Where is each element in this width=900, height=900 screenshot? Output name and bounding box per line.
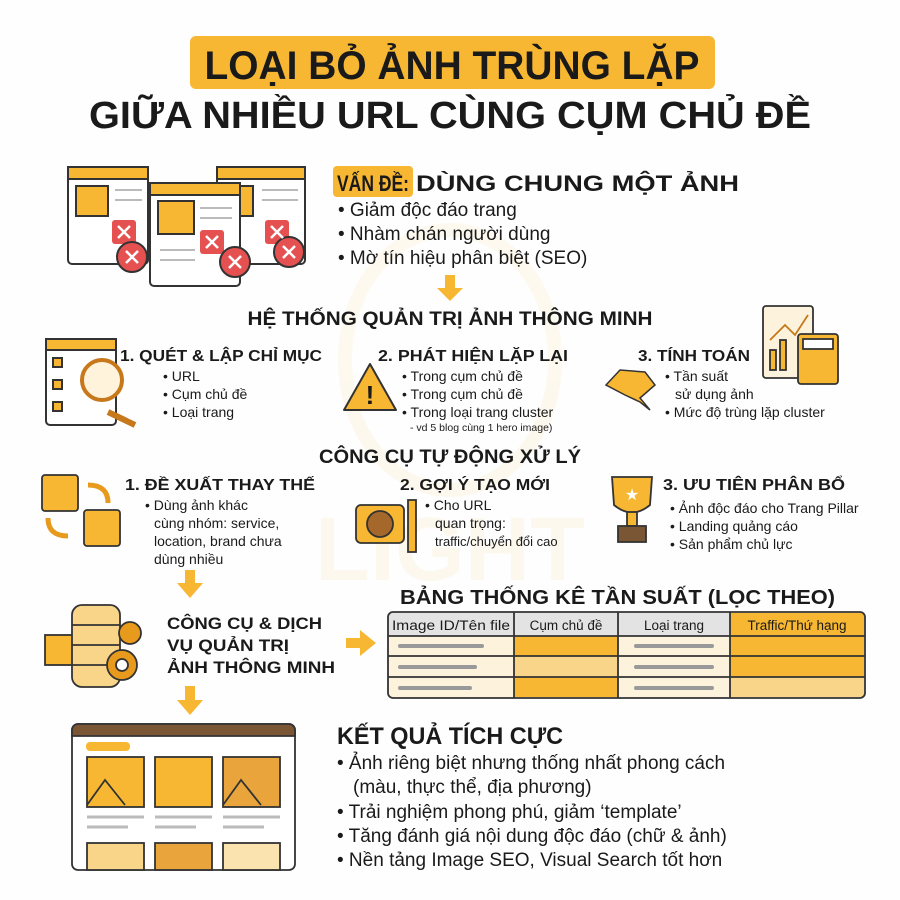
step 2 detect: 2. PHÁT HIỆN LẶP LẠI [378,346,568,365]
results bullets: • Ảnh riêng biệt nhưng thống nhất phong cách [337,752,725,774]
problem bullets [338,200,587,269]
step 1 replace: cùng nhóm: service, [154,515,279,531]
icon: calculator chart [763,306,838,384]
heading: problem: DÙNG CHUNG MỘT ẢNH [416,171,739,196]
step 3 calculate: 3. TÍNH TOÁN [638,346,750,365]
results bullets: • Nền tảng Image SEO, Visual Search tốt hơn [337,850,722,871]
step 1 replace: location, brand chưa [154,533,282,549]
step 2 create: traffic/chuyển đổi cao [435,534,558,549]
problem bullets: • Mờ tín hiệu phân biệt (SEO) [338,248,587,269]
heading: problem: VẤN ĐỀ: [337,171,409,196]
heading: problem [333,166,739,197]
step 2 detect: • Trong cụm chủ đề [402,386,523,402]
step 2 create [400,475,558,549]
results bullets: (màu, thực thể, địa phương) [353,777,592,798]
icon: warning [344,364,396,410]
arrow down [177,686,203,715]
heading: results: KẾT QUẢ TÍCH CỰC [337,721,563,750]
step 2 create: quan trọng: [435,515,506,531]
heading: table: BẢNG THỐNG KÊ TẦN SUẤT (LỌC THEO) [400,585,835,609]
step 1 scan: • Loại trang [163,404,234,420]
watermark [315,230,585,600]
step 2 create: 2. GỢI Ý TẠO MỚI [400,475,550,494]
step 2 detect: • Trong loại trang cluster [402,404,554,420]
icon: duplicate pages [68,167,305,286]
table: Cụm chủ đề [530,618,602,633]
step 1 replace: • Dùng ảnh khác [145,497,248,513]
problem bullets: • Nhàm chán người dùng [338,224,550,245]
step 2 detect: • Trong cụm chủ đề [402,368,523,384]
arrow down [437,275,463,301]
step 3 priority: • Landing quảng cáo [670,518,798,534]
results bullets: • Trải nghiệm phong phú, giảm ‘template’ [337,802,682,823]
step 2 detect [378,346,568,434]
icon: browser results [72,724,295,870]
icon: trophy [612,477,652,542]
results bullets [337,752,727,871]
heading: auto tools: CÔNG CỤ TỰ ĐỘNG XỬ LÝ [319,446,581,468]
step 3 calculate [638,346,825,420]
step 3 priority: 3. ƯU TIÊN PHÂN BỔ [663,475,845,494]
text: tools service: VỤ QUẢN TRỊ [167,636,289,655]
text: tools service [167,614,335,677]
table [388,612,865,698]
step 1 scan: • Cụm chủ đề [163,386,247,402]
text: tools service: CÔNG CỤ & DỊCH [167,614,322,633]
icon: warning: ! [366,380,374,410]
step 1 replace: 1. ĐỀ XUẤT THAY THẾ [125,475,315,494]
title: GIỮA NHIỀU URL CÙNG CỤM CHỦ ĐỀ [89,93,811,137]
table: Traffic/Thứ hạng [747,618,847,633]
step 3 priority: • Ảnh độc đáo cho Trang Pillar [670,500,859,516]
step 1 replace [125,475,315,567]
table: Loại trang [644,618,704,633]
icon: swap images [42,475,120,546]
watermark: LIGHT [315,500,585,600]
arrow right [346,630,376,656]
title [89,36,811,137]
step 1 replace: dùng nhiều [154,551,223,567]
step 3 calculate: sử dụng ảnh [675,386,754,402]
icon: trophy: ★ [625,487,639,504]
results bullets: • Tăng đánh giá nội dung độc đáo (chữ & ảnh) [337,826,727,847]
arrow down [177,570,203,598]
text: tools service: ẢNH THÔNG MINH [167,658,335,677]
step 1 scan: 1. QUÉT & LẬP CHỈ MỤC [120,346,322,365]
step 2 create: • Cho URL [425,497,492,513]
step 1 scan: • URL [163,368,200,384]
icon: hand [606,370,655,410]
title: LOẠI BỎ ẢNH TRÙNG LẶP [204,42,700,88]
table: Image ID/Tên file [392,618,510,633]
step 3 priority: • Sản phẩm chủ lực [670,536,792,552]
step 3 calculate: • Tần suất [665,368,728,384]
step 3 calculate: • Mức độ trùng lặp cluster [665,404,825,420]
heading: smart system: HỆ THỐNG QUẢN TRỊ ẢNH THÔNG MINH [248,308,652,330]
icon: database gears [45,605,141,687]
step 3 priority [663,475,859,552]
icon: scan index [46,339,135,425]
problem bullets: • Giảm độc đáo trang [338,200,517,221]
step 2 detect: - vd 5 blog cùng 1 hero image) [410,422,552,434]
icon: camera pen [356,500,416,552]
step 1 scan [120,346,322,420]
